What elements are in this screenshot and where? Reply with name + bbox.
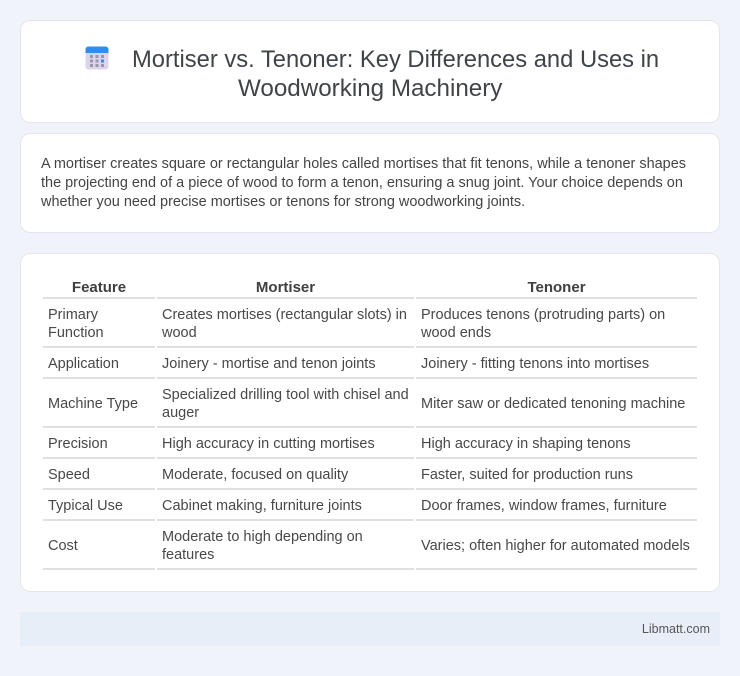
table: comparison: Specialized drilling tool with chisel and [162, 387, 409, 403]
table: comparison: Machine Type [48, 396, 138, 412]
table: comparison: High accuracy in cutting mortises [162, 436, 375, 452]
table: comparison: Moderate, focused on quality [162, 467, 348, 483]
title [132, 46, 659, 102]
footer bar [20, 612, 720, 646]
table: comparison: Varies; often higher for automated models [421, 538, 690, 554]
table: comparison: Joinery - mortise and tenon joints [162, 356, 376, 372]
panel: title header [20, 20, 720, 123]
footer text: site credit: Libmatt.com [642, 622, 710, 636]
table: comparison: Typical Use [48, 498, 123, 514]
table: comparison: Application [48, 356, 119, 372]
title: Woodworking Machinery [238, 75, 502, 102]
table: comparison: Mortiser [256, 279, 315, 296]
table: comparison: Cabinet making, furniture joints [162, 498, 362, 514]
table: comparison: wood [162, 325, 197, 341]
table: comparison: Joinery - fitting tenons into mortises [421, 356, 649, 372]
text block: introduction: A mortiser creates square or rectangular holes called mortises that fit tenons, while a tenoner shapes [41, 156, 686, 172]
table: comparison: Precision [48, 436, 108, 452]
title: Mortiser vs. Tenoner: Key Differences and Uses in [132, 46, 659, 73]
table: comparison: Faster, suited for production runs [421, 467, 633, 483]
text block: introduction [41, 156, 686, 210]
table: comparison: auger [162, 405, 199, 421]
table: comparison: features [162, 547, 214, 563]
icon: calendar grid [86, 46, 108, 70]
table: comparison: Feature [72, 279, 126, 296]
table: comparison [43, 279, 697, 570]
table: comparison: Tenoner [527, 279, 586, 296]
table: comparison: wood ends [421, 325, 491, 341]
panel: comparison table [20, 253, 720, 592]
table: comparison: Moderate to high depending on [162, 529, 363, 545]
table: comparison: Cost [48, 538, 78, 554]
table: comparison: Miter saw or dedicated tenoning machine [421, 396, 685, 412]
table: comparison: High accuracy in shaping tenons [421, 436, 631, 452]
panel: introduction [20, 133, 720, 233]
table: comparison: Function [48, 325, 104, 341]
table: comparison: Primary [48, 307, 98, 323]
table: comparison: Creates mortises (rectangular slots) in [162, 307, 407, 323]
table: comparison: Produces tenons (protruding parts) on [421, 307, 665, 323]
text block: introduction: whether you need precise mortises or tenons for strong woodworking joints. [41, 194, 525, 210]
text block: introduction: the projecting end of a piece of wood to form a tenon, ensuring a snug joint. Your choice depends on [41, 175, 683, 191]
table: comparison: Door frames, window frames, furniture [421, 498, 667, 514]
table: comparison: Speed [48, 467, 90, 483]
